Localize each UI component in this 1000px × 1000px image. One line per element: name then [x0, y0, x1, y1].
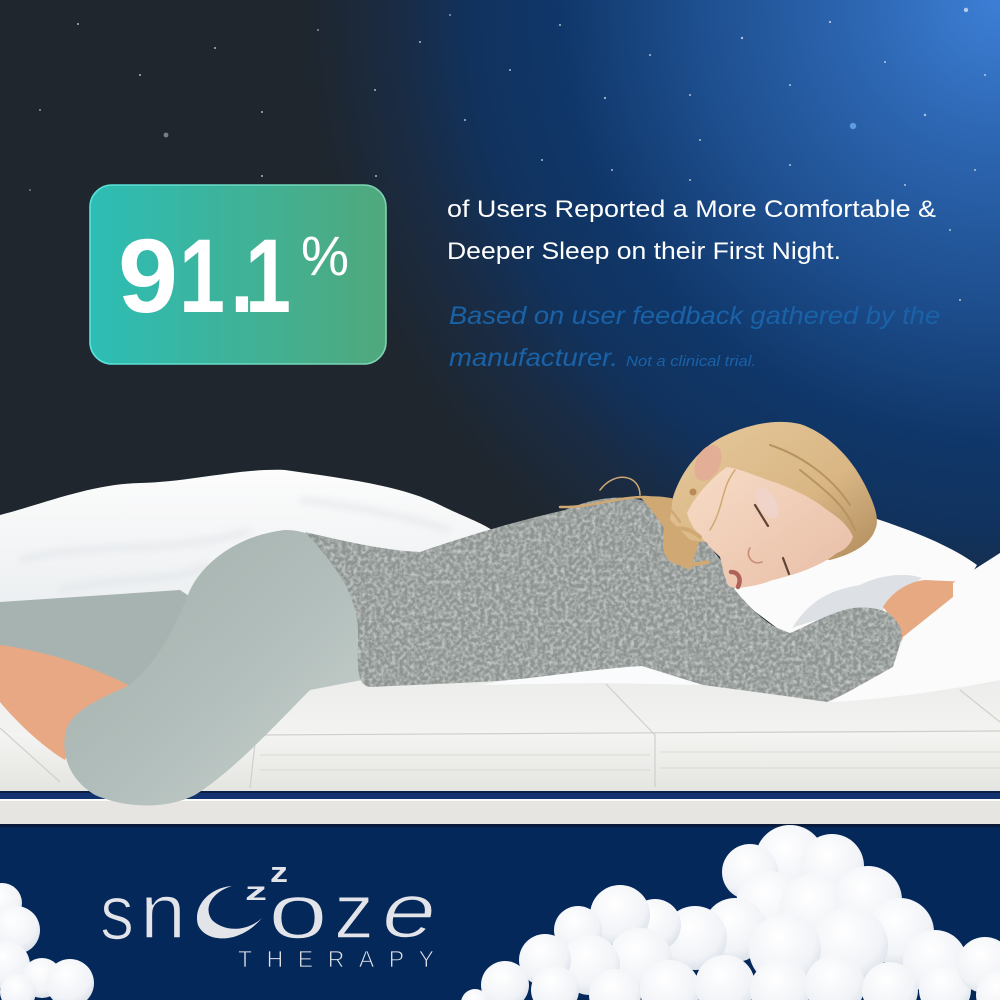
crescent moon — [197, 886, 262, 938]
stars — [29, 8, 986, 301]
disclaimer text: manufacturer. — [449, 344, 618, 372]
earring — [690, 488, 696, 496]
bottom right cloud — [461, 825, 1000, 1000]
logo: snooze therapy — [100, 857, 436, 972]
pillow shadow — [792, 575, 922, 628]
foot skin — [0, 645, 130, 760]
forearm — [883, 580, 970, 645]
sweater — [305, 498, 902, 702]
logo tagline: THERAPY — [238, 946, 434, 972]
zzz: z — [245, 878, 267, 906]
face — [687, 467, 853, 588]
eyelid highlight — [751, 484, 783, 522]
headline text: Deeper Sleep on their First Night. — [447, 238, 841, 265]
hair — [670, 422, 877, 560]
sheet under body — [480, 666, 703, 685]
disclaimer text: Not a clinical trial. — [626, 354, 756, 370]
hair back and nape — [640, 496, 700, 570]
near leg — [64, 530, 362, 806]
logo: snooze therapy: z — [334, 867, 374, 955]
white band — [0, 799, 1000, 825]
stat number — [118, 218, 291, 335]
stat box: 91.1% — [90, 185, 386, 364]
ear — [689, 441, 727, 485]
curl and hair strands — [560, 445, 855, 564]
mattress — [0, 640, 1000, 1000]
right blanket — [830, 553, 1000, 702]
logo: snooze therapy: z — [270, 857, 288, 889]
girl's head — [560, 422, 877, 588]
headline text — [447, 196, 936, 265]
navy mattress base — [0, 825, 1000, 1000]
logo: snooze therapy: e — [382, 866, 436, 954]
bottom left cloud — [0, 883, 94, 1000]
disclaimer text — [449, 302, 940, 372]
disclaimer text: Based on user feedback gathered by the — [449, 302, 940, 330]
stat number: . — [230, 218, 254, 335]
eyes nose and mouth — [731, 505, 789, 587]
headline text: of Users Reported a More Comfortable & — [447, 196, 936, 223]
far leg — [0, 590, 195, 690]
logo wordmark: s — [100, 868, 134, 956]
white blanket left — [0, 470, 492, 605]
mattress quilted top — [0, 640, 1000, 735]
pillow — [730, 519, 977, 640]
percent sign: % — [301, 224, 349, 287]
stat number: 1 — [179, 218, 225, 335]
logo: snooze therapy: o — [268, 867, 328, 955]
mattress front panel — [0, 733, 1000, 792]
logo: snooze therapy: n — [140, 867, 186, 955]
stat number: 1 — [245, 218, 291, 335]
navy piping — [0, 791, 1000, 800]
stat number: 9 — [118, 218, 178, 335]
